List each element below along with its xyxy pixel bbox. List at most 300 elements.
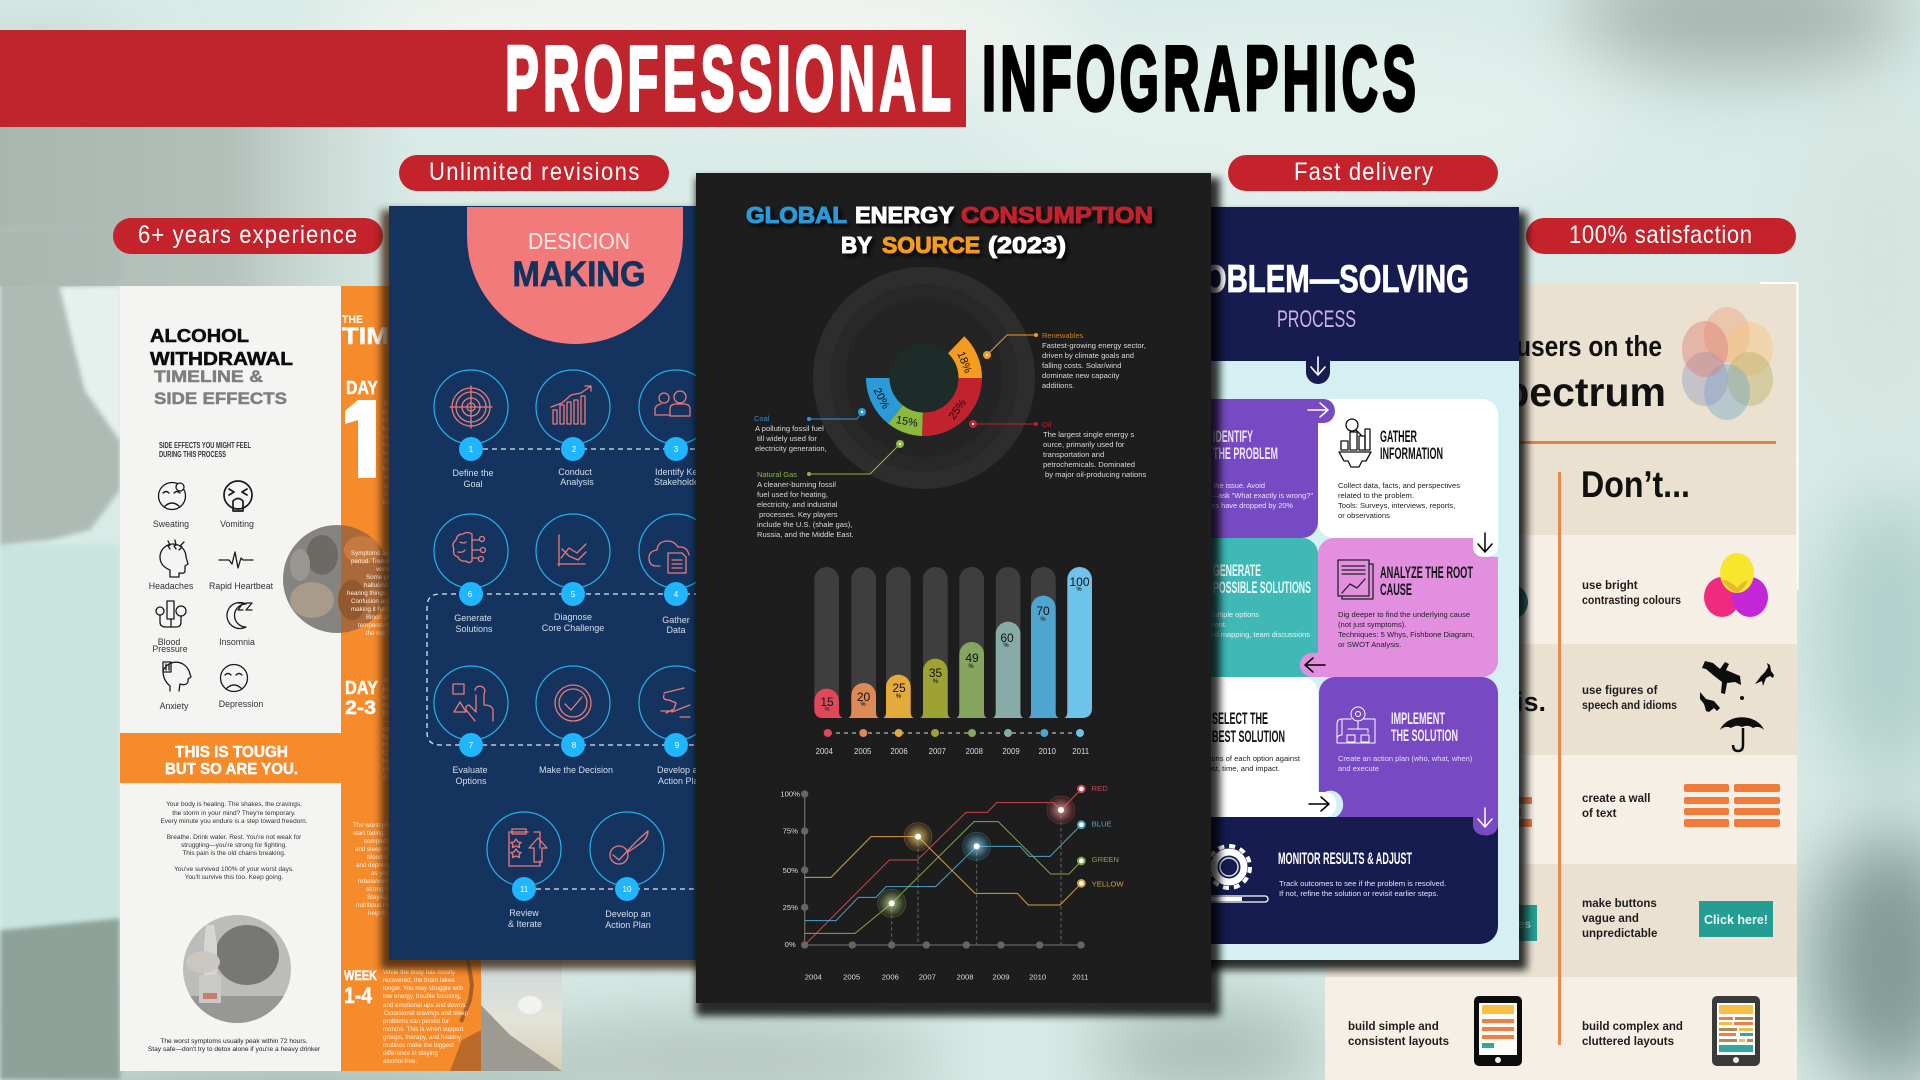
chart: line chart: 0% xyxy=(785,940,796,949)
text: day 1 fragments: Some pe xyxy=(366,574,391,581)
text: week 1-4 body: routines make the biggest xyxy=(383,1042,454,1049)
chart: pill bars: % xyxy=(860,702,866,708)
chart: timeline dots xyxy=(816,729,1089,756)
text: side effects intro: DURING THIS PROCESS xyxy=(159,450,226,459)
callout: coal: Coal xyxy=(754,414,770,423)
labels: decision steps: Review xyxy=(509,908,539,918)
labels: decision steps: Action Plan xyxy=(605,920,651,930)
text: week 1-4 body: difference in staying xyxy=(383,1050,438,1057)
labels: side effects: Anxiety xyxy=(160,701,189,711)
row text: simple layouts: consistent layouts xyxy=(1348,1036,1449,1048)
heading: this is tough xyxy=(165,744,298,778)
heading: global energy consumption: SOURCE xyxy=(882,232,980,258)
row text: vague buttons: unpredictable xyxy=(1582,928,1657,940)
chart: timeline dots: 2005 xyxy=(854,747,872,756)
text: day 1 fragments: the risk o xyxy=(366,630,392,637)
row text: wall of text: of text xyxy=(1582,808,1617,820)
step: monitor results and adjust xyxy=(1150,808,1498,944)
text: day 1 fragments: period. Tremors xyxy=(351,558,394,565)
row text: wall of text: create a wall xyxy=(1582,793,1650,805)
text: day 1 fragments: wi xyxy=(382,450,389,457)
heading: global energy consumption: BY xyxy=(841,232,872,258)
text: day 1 fragments: hallucina xyxy=(364,582,389,589)
icon: simple tablet xyxy=(1474,996,1522,1066)
step: monitor results and adjust: MONITOR RESULTS & ADJUST xyxy=(1278,849,1412,868)
text: day 2-3 fragments: and sleep re xyxy=(355,846,390,853)
step: identify the problem xyxy=(1150,399,1335,538)
row text: vague buttons: make buttons xyxy=(1582,898,1657,910)
labels: decision steps: Make the Decision xyxy=(539,765,613,775)
chart: pill bars: % xyxy=(1040,617,1046,623)
chart: pill bars: 35 xyxy=(929,666,942,680)
heading: day 1 xyxy=(345,378,378,478)
callout: renewables xyxy=(983,331,1146,390)
text: day 2-3 fragments: Ho xyxy=(383,758,391,765)
heading: this is tough: THIS IS TOUGH xyxy=(175,744,288,761)
text: day 1 fragments: nc xyxy=(383,434,390,441)
labels: side effects: Rapid Heartbeat xyxy=(209,581,274,591)
labels: decision steps: Options xyxy=(455,776,487,786)
step: generate possible solutions: GENERATE xyxy=(1213,561,1261,580)
labels: side effects: Insomnia xyxy=(219,637,255,647)
heading: day 1: DAY xyxy=(346,378,378,398)
header: pink semicircle xyxy=(467,207,683,344)
icon: shapes and touch xyxy=(453,684,493,721)
step: implement the solution: Create an action plan (who, what, when) xyxy=(1338,754,1473,763)
panel: decision making xyxy=(389,206,713,960)
chart: line chart: BLUE xyxy=(1092,820,1112,829)
step: gather information: or observations xyxy=(1338,511,1390,520)
chart: pill bars: % xyxy=(933,679,939,685)
heading: Don't: Don’t... xyxy=(1581,464,1690,505)
chart: pill bars: 25 xyxy=(892,681,906,695)
icon: cloud document xyxy=(649,541,689,573)
text: day 2-3 fragments: Mood s xyxy=(367,854,387,861)
labels: decision steps: & Iterate xyxy=(508,919,542,929)
step rings and numbers: 8 xyxy=(572,741,577,750)
callout: natural gas: Russia, and the Middle East. xyxy=(757,530,854,539)
heading: global energy consumption: GLOBAL xyxy=(746,202,847,228)
heading: day 2-3: DAY xyxy=(345,678,378,698)
arrow: down from header xyxy=(1306,357,1330,384)
labels: decision steps: Action Plan xyxy=(658,776,704,786)
step: implement the solution: IMPLEMENT xyxy=(1391,709,1445,728)
heading: global energy consumption: (2023) xyxy=(988,232,1066,258)
text: day 1 fragments: ha xyxy=(383,442,390,449)
chart: pill bars: 70 xyxy=(1036,604,1050,618)
step rings and numbers: 2 xyxy=(572,445,577,454)
text: day 2-3 fragments: ma xyxy=(383,702,392,709)
labels: side effects: Blood xyxy=(158,637,180,647)
step rings and numbers: 10 xyxy=(623,885,632,894)
text: day 2-3 fragments: Th xyxy=(383,678,391,685)
row text: simple layouts xyxy=(1348,1021,1449,1048)
heading: alcohol withdrawal: TIMELINE & xyxy=(154,367,263,386)
heading: desicion making xyxy=(512,228,646,294)
text: encouragement: Every minute you endure is a step toward freedom. xyxy=(160,818,308,825)
chart: line chart: 2006 xyxy=(882,973,899,982)
text: day 1 fragments: en xyxy=(384,483,391,490)
labels: decision steps: Define the xyxy=(452,468,494,478)
step: gather information: Collect data, facts, and perspectives xyxy=(1338,481,1460,490)
callout: coal: electricity generation, xyxy=(755,444,827,453)
text: day 1 fragments: bc xyxy=(383,466,390,473)
icon: bright circles xyxy=(1704,553,1768,617)
heading: week 1-4: WEEK xyxy=(344,967,377,983)
callout: oil xyxy=(969,420,1147,479)
pill: Fast delivery: Fast delivery xyxy=(1294,158,1433,185)
labels: side effects xyxy=(149,519,274,711)
step rings and numbers: 1 xyxy=(469,445,474,454)
icon: magnifier chart gear xyxy=(1339,419,1371,467)
step: implement the solution: THE SOLUTION xyxy=(1391,726,1458,745)
text: encouragement: Breathe. Drink water. Rest. You're not weak for xyxy=(167,834,302,841)
labels: decision steps: Analysis xyxy=(560,477,594,487)
chart: line chart: 2005 xyxy=(843,973,860,982)
chart: line chart: YELLOW xyxy=(1092,880,1124,889)
labels: side effects: Pressure xyxy=(152,644,188,654)
step rings and numbers: 6 xyxy=(468,590,473,599)
row text: use bright colours: contrasting colours xyxy=(1582,595,1681,607)
text: week 1-4 body: low energy, trouble focusing, xyxy=(383,993,462,1000)
panel: problem-solving process xyxy=(1150,207,1519,960)
chart: line chart: 75% xyxy=(783,827,798,836)
step: analyze the root cause: or SWOT Analysis. xyxy=(1338,640,1402,649)
row text: vague buttons: vague and xyxy=(1582,913,1639,925)
icon: raining cats and dogs xyxy=(1700,661,1774,751)
text: worst symptoms note: Stay safe—don't try to detox alone if you're a heavy drinker xyxy=(148,1046,321,1053)
heading: alcohol withdrawal xyxy=(150,326,293,408)
do-side button fragment: es xyxy=(1518,917,1531,931)
connector: dashed path xyxy=(427,449,699,889)
chart: timeline dots: 2011 xyxy=(1072,747,1089,756)
callout: oil: Oil xyxy=(1042,420,1052,429)
row text: complex layouts xyxy=(1582,1021,1683,1048)
chart: donut xyxy=(813,267,1035,489)
text: day 1 fragments: Symptoms are xyxy=(351,550,391,557)
step rings and numbers xyxy=(434,370,713,901)
step: analyze the root cause: Techniques: 5 Whys, Fishbone Diagram, xyxy=(1338,630,1474,639)
do-side heading fragment: is. xyxy=(1516,687,1546,717)
text: day 1 fragments: Th xyxy=(383,401,391,408)
text: week 1-4 body: groups, therapy, and healthy xyxy=(383,1034,462,1041)
text: day 1 fragments: b xyxy=(385,491,389,498)
labels: decision steps: Gather xyxy=(662,615,690,625)
labels: decision steps: Evaluate xyxy=(452,765,488,775)
title: INFOGRAPHICS: INFOGRAPHICS xyxy=(982,27,1416,130)
heading: problem-solving: PROBLEM—SOLVING xyxy=(1163,258,1469,301)
pill: Fast delivery xyxy=(1228,155,1498,191)
heading: day 2-3: 2-3 xyxy=(345,698,376,719)
icon: report chart xyxy=(1338,560,1373,599)
callout: oil: ource, primarily used for xyxy=(1043,440,1125,449)
chart: donut: 25% xyxy=(947,397,969,422)
row text: wall of text xyxy=(1582,793,1650,820)
icon: check seal xyxy=(555,685,591,721)
step: implement the solution: and execute xyxy=(1338,764,1379,773)
panel: do and don't spectrum guide xyxy=(1325,283,1798,1080)
do-side icon fragment xyxy=(1492,584,1528,620)
icon: vomiting xyxy=(224,481,252,511)
step: monitor results and adjust: Track outcomes to see if the problem is resolved. xyxy=(1279,879,1446,888)
chart: pill bars: % xyxy=(824,707,830,713)
text: day 2-3 fragments: start fading. xyxy=(353,830,386,837)
text: day 2-3 fragments: as your xyxy=(371,870,391,877)
step: implement the solution xyxy=(1319,677,1498,836)
text: day 1 fragments: temperature xyxy=(358,622,392,629)
heading: week 1-4 xyxy=(344,967,377,1008)
text: day 1 fragments: qu xyxy=(383,409,390,416)
callout: renewables: Renewables xyxy=(1042,331,1084,340)
callout: renewables: falling costs. Solar/wind xyxy=(1042,361,1121,370)
chart: pill bars: 100 xyxy=(1069,575,1090,589)
step: identify the problem: IDENTIFY xyxy=(1213,427,1253,446)
text: day 2-3 fragments: an xyxy=(383,774,390,781)
chart: pill bars: % xyxy=(1003,643,1009,649)
icon: gear progress xyxy=(1205,846,1268,902)
labels: decision steps: Develop an xyxy=(657,765,703,775)
text: encouragement: You've survived 100% of your worst days. xyxy=(174,866,294,873)
icon: sweating xyxy=(158,482,186,510)
text: day 2-3 fragments: DT xyxy=(383,750,391,757)
icon: insomnia xyxy=(227,602,252,628)
icon: wall of text bars xyxy=(1500,784,1780,827)
pill: Unlimited revisions: Unlimited revisions xyxy=(429,158,639,185)
chart: line chart: 2007 xyxy=(919,973,936,982)
row text: figures of speech: speech and idioms xyxy=(1582,700,1677,712)
pill: 100% satisfaction xyxy=(1526,218,1796,254)
chart: donut: 20% xyxy=(871,386,892,411)
callout: oil: transportation and xyxy=(1043,450,1104,459)
icon: anxiety xyxy=(163,662,191,691)
text: day 1 fragments: hearing things xyxy=(347,590,386,597)
step: select the best solution: SELECT THE xyxy=(1212,709,1268,728)
step rings and numbers: 11 xyxy=(520,885,529,894)
photo: drinker circle xyxy=(283,525,395,633)
step: generate possible solutions: without judgment. xyxy=(1168,620,1227,629)
chart: line chart: RED xyxy=(1092,784,1108,793)
text: day 2-3 fragments: fe xyxy=(383,734,389,741)
heading: global energy consumption: ENERGY xyxy=(855,202,954,228)
heading: alcohol withdrawal: SIDE EFFECTS xyxy=(154,389,287,408)
text: day 1 fragments: making it hard xyxy=(351,606,390,613)
heading: users on the spectrum: users on the xyxy=(1516,331,1662,363)
pill: 6+ years experience xyxy=(113,218,383,254)
text: day 2-3 fragments: ca xyxy=(383,726,390,733)
text: side effects intro xyxy=(159,441,251,459)
chart: line chart: 2008 xyxy=(956,973,974,982)
step: select the best solution: cost, time, and impact. xyxy=(1204,764,1280,773)
heading: the timeline: TIM xyxy=(342,323,389,350)
callout: natural gas: electricity, and industrial xyxy=(757,500,838,509)
icon: overlapping colour flower xyxy=(1682,307,1773,420)
text: day 2-3 fragments: nutritious m xyxy=(356,902,388,909)
text: week 1-4 body: longer. You may struggle with xyxy=(383,985,464,992)
step: generate possible solutions xyxy=(1150,538,1318,677)
row text: use bright colours: use bright xyxy=(1582,580,1638,592)
text: week 1-4 body: Occasional cravings and sleep xyxy=(384,1010,468,1017)
step: identify the problem: Define the issue. Avoid xyxy=(1190,481,1265,490)
heading: day 2-3 xyxy=(345,678,378,719)
icon: line graph xyxy=(558,535,586,566)
step: monitor results and adjust: If not, refine the solution or revisit earlier steps. xyxy=(1279,889,1438,898)
pill: 100% satisfaction: 100% satisfaction xyxy=(1569,221,1752,248)
text: day 1 fragments: Confusion and xyxy=(351,598,391,605)
row text: figures of speech xyxy=(1582,685,1677,712)
callout: natural gas xyxy=(757,440,904,539)
step rings and numbers: 5 xyxy=(571,590,576,599)
text: day 2-3 fragments: The worst ph xyxy=(353,822,389,829)
callout: coal xyxy=(754,408,866,453)
shadow: problem-solving card xyxy=(1205,212,1527,970)
icon: signature hand xyxy=(661,688,690,717)
do-side button fragment xyxy=(1490,905,1537,941)
icon: heartbeat xyxy=(219,552,253,568)
text: day 2-3 fragments: en xyxy=(383,694,390,701)
labels: decision steps: Diagnose xyxy=(554,612,592,622)
callout: natural gas: processes. Key players xyxy=(759,510,838,519)
pill: 6+ years experience: 6+ years experience xyxy=(138,221,357,248)
photo: mountain sky with climber xyxy=(481,960,562,1071)
callout: oil: by major oil-producing nations xyxy=(1045,470,1147,479)
labels: decision steps: Goal xyxy=(463,479,483,489)
labels: decision steps: Generate xyxy=(454,613,492,623)
chart: pill bars xyxy=(814,567,1092,718)
icon: brain circuit xyxy=(453,532,486,562)
callout: natural gas: A cleaner-burning fossil xyxy=(757,480,836,489)
chart: pill bars: 60 xyxy=(1000,631,1014,645)
callout: coal: till widely used for xyxy=(757,434,817,443)
heading: global energy consumption xyxy=(746,202,1153,258)
callout: oil: petrochemicals. Dominated xyxy=(1043,460,1135,469)
text: day 2-3 fragments xyxy=(353,678,392,917)
chart: timeline dots: 2006 xyxy=(890,747,908,756)
chart: line chart: 2011 xyxy=(1072,973,1089,982)
text: day 1 fragments xyxy=(347,401,394,637)
heading: this is tough: BUT SO ARE YOU. xyxy=(165,761,298,778)
banner: red band xyxy=(0,30,966,127)
step: analyze the root cause: (not just symptoms). xyxy=(1338,620,1406,629)
text: worst symptoms note xyxy=(148,1038,321,1053)
icon: click here button: Click here! xyxy=(1704,913,1768,927)
text: week 1-4 body: recovered, the brain takes xyxy=(383,977,455,984)
labels: side effects: Depression xyxy=(219,699,263,709)
text: encouragement xyxy=(160,801,308,881)
text: encouragement: This pain is the old chains breaking. xyxy=(182,850,286,857)
row text: complex layouts: cluttered layouts xyxy=(1582,1036,1674,1048)
labels: decision steps: Stakeholders xyxy=(654,477,707,487)
text: day 2-3 fragments: ba xyxy=(383,710,390,717)
text: day 2-3 fragments: Staying xyxy=(367,894,388,901)
chart: pill bars: % xyxy=(1076,587,1082,593)
icon: blueprint gear xyxy=(1337,707,1375,743)
chart: timeline dots: 2008 xyxy=(966,747,983,756)
text: worst symptoms note: The worst symptoms usually peak within 72 hours. xyxy=(160,1038,308,1045)
heading: the timeline: THE xyxy=(342,314,363,326)
text: day 2-3 fragments: pe xyxy=(383,686,390,693)
callout: natural gas: fuel used for heating, xyxy=(757,490,828,499)
text: week 1-4 body: and emotional ups and downs. xyxy=(383,1002,467,1009)
icon: headache xyxy=(160,540,188,577)
step: gather information: GATHER xyxy=(1380,427,1417,446)
step: analyze the root cause xyxy=(1300,533,1498,677)
chart: donut: 15% xyxy=(895,414,919,430)
step: gather information: related to the problem. xyxy=(1338,491,1414,500)
step: gather information: Tools: Surveys, interviews, reports, xyxy=(1338,501,1455,510)
chart: line chart: 2010 xyxy=(1029,973,1046,982)
heading: alcohol withdrawal: ALCOHOL xyxy=(150,326,249,346)
chart: line chart: 100% xyxy=(780,790,800,799)
text: week 1-4 body: problems can persist for xyxy=(383,1018,449,1025)
labels: decision steps: Data xyxy=(666,625,686,635)
shadow: energy card xyxy=(696,178,1220,1016)
panel: global energy consumption xyxy=(696,173,1211,1003)
heading: week 1-4: 1-4 xyxy=(344,983,373,1008)
step: generate possible solutions: Brainstorm multiple options xyxy=(1170,610,1259,619)
text: encouragement: You'll survive this too. Keep going. xyxy=(185,874,283,881)
chart: line chart xyxy=(780,784,1124,982)
step: select the best solution xyxy=(1150,677,1336,817)
icon: growth chart xyxy=(551,386,591,424)
text: encouragement: the storm in your mind? They're temporary. xyxy=(172,810,296,817)
icon: rocket check xyxy=(610,831,648,864)
text: day 1 fragments: bo xyxy=(383,426,390,433)
chart: pill bars: 49 xyxy=(965,651,979,665)
chart: pill bars: % xyxy=(896,694,902,700)
chart: timeline dots: 2007 xyxy=(929,747,946,756)
icon: click here button xyxy=(1699,901,1773,937)
text: week 1-4 body: alcohol-free. xyxy=(383,1058,417,1065)
pill: Unlimited revisions xyxy=(399,155,669,191)
labels: side effects: Sweating xyxy=(153,519,189,529)
text: week 1-4 body: months. This is when support xyxy=(383,1026,464,1033)
chart: pill bars: 15 xyxy=(820,695,834,709)
step: identify the problem: Don't assume—ask "What exactly is wrong?" xyxy=(1166,491,1313,500)
heading: users on the spectrum: spectrum xyxy=(1481,369,1666,415)
step: gather information: INFORMATION xyxy=(1380,444,1443,463)
chart: timeline dots: 2009 xyxy=(1002,747,1020,756)
step: select the best solution: BEST SOLUTION xyxy=(1212,727,1285,746)
icon: blood pressure xyxy=(156,601,186,627)
step: select the best solution: Weigh pros and cons of each option against xyxy=(1152,754,1301,763)
callout: oil: The largest single energy s xyxy=(1043,430,1134,439)
labels: decision steps: Conduct xyxy=(558,467,592,477)
chart: line chart: 50% xyxy=(783,866,798,875)
step: analyze the root cause: Dig deeper to find the underlying cause xyxy=(1338,610,1470,619)
panel: alcohol withdrawal infographic xyxy=(120,286,562,1071)
callout: renewables: Fastest-growing energy sector, xyxy=(1042,341,1146,350)
heading: global energy consumption: CONSUMPTION xyxy=(961,202,1153,228)
text: day 1 fragments: Yo xyxy=(383,458,391,465)
title: PROFESSIONAL: PROFESSIONAL xyxy=(505,27,951,130)
step rings and numbers: 4 xyxy=(674,590,679,599)
chart: line chart: 2004 xyxy=(805,973,823,982)
labels: side effects: Headaches xyxy=(149,581,194,591)
step: identify the problem: Example: Sales have dropped by 20% xyxy=(1168,501,1293,510)
text: day 2-3 fragments: th xyxy=(383,742,389,749)
chart: line chart: 25% xyxy=(783,903,798,912)
text: day 1 fragments: Blood pr xyxy=(366,614,389,621)
chart: timeline dots: 2010 xyxy=(1039,747,1057,756)
text: week 1-4 body: While the body has mostly xyxy=(383,969,456,976)
step: generate possible solutions: POSSIBLE SOLUTIONS xyxy=(1213,578,1311,597)
callout: natural gas: Natural Gas xyxy=(757,470,797,479)
callout: natural gas: include the U.S. (shale gas), xyxy=(757,520,852,529)
icon: people xyxy=(655,391,690,416)
text: day 1 fragments: vomi xyxy=(376,566,389,573)
chart: donut: 18% xyxy=(954,350,974,375)
chart: line chart: 2009 xyxy=(992,973,1010,982)
